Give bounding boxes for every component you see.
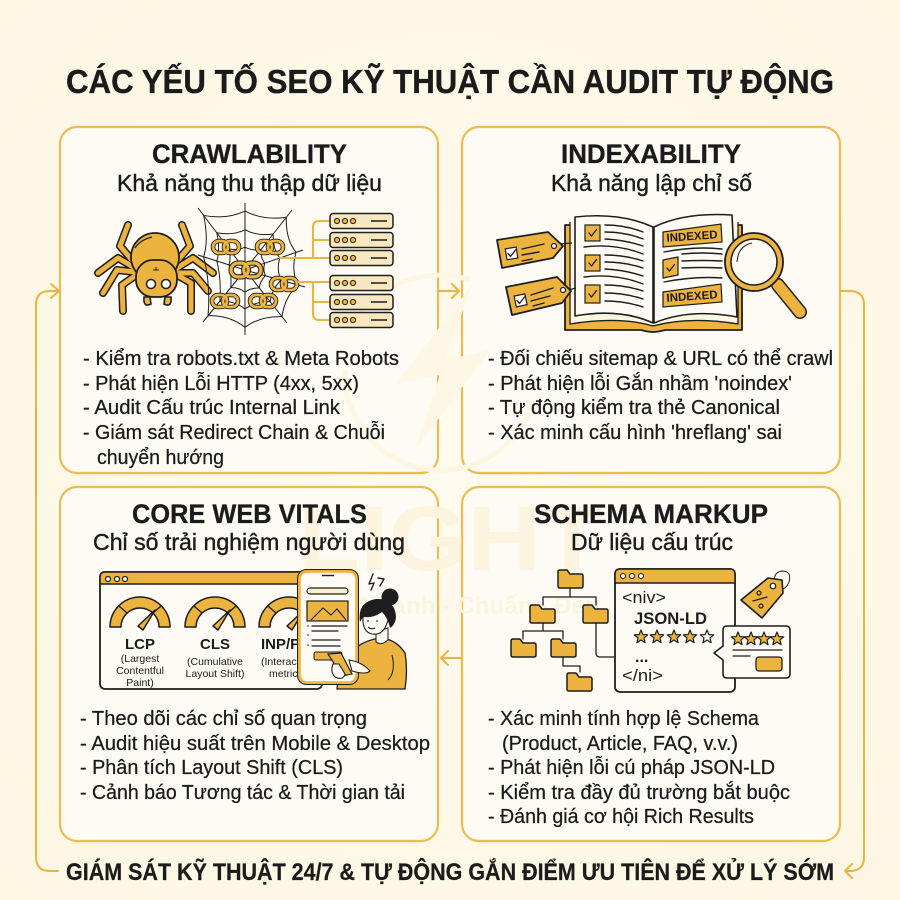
icon: browser window with gauges: Paint) xyxy=(126,677,154,689)
arrow: schema to core web vitals xyxy=(441,651,462,665)
icon: browser window with gauges: (Cumulative xyxy=(187,656,243,668)
bullets: core web vitals: - Audit hiệu suất trên Mobile & Desktop xyxy=(80,733,430,755)
icon: JSON-LD code window: ... xyxy=(635,649,648,666)
icon: browser window with gauges: (Interac xyxy=(261,656,297,668)
heading: crawlability: CRAWLABILITY xyxy=(152,139,347,169)
icon: browser window with gauges: LCP xyxy=(125,636,155,653)
heading: schema markup: SCHEMA MARKUP xyxy=(534,499,768,529)
bullets: indexability: - Xác minh cấu hình 'hreflang' sai xyxy=(488,422,782,444)
icon: JSON-LD code window: <niv> xyxy=(622,589,666,607)
arrow: crawlability to indexability xyxy=(438,284,459,298)
icon: browser window with gauges: metrics) xyxy=(269,668,306,680)
heading: core web vitals: CORE WEB VITALS xyxy=(132,499,367,529)
subheading: crawlability: Khả năng thu thập dữ liệu xyxy=(117,170,382,196)
bullets: schema markup: - Đánh giá cơ hội Rich Results xyxy=(488,806,754,828)
bullets: core web vitals: - Phân tích Layout Shift (CLS) xyxy=(80,757,343,779)
subheading: indexability: Khả năng lập chỉ số xyxy=(551,170,752,196)
bullets: core web vitals: - Theo dõi các chỉ số quan trọng xyxy=(80,708,367,730)
icon: open book xyxy=(565,214,742,332)
icon: server stack with connectors xyxy=(280,214,393,328)
bullets: schema markup xyxy=(488,708,790,828)
title: CÁC YẾU TỐ SEO KỸ THUẬT CẦN AUDIT TỰ ĐỘNG xyxy=(66,62,834,100)
icon: JSON-LD code window: JSON-LD xyxy=(634,609,707,628)
bullets: crawlability: - Kiểm tra robots.txt & Meta Robots xyxy=(83,348,399,370)
icon: phone and person xyxy=(298,570,406,689)
icon: folder tree xyxy=(511,570,615,691)
bullets: schema markup: (Product, Article, FAQ, v.v.) xyxy=(502,733,738,755)
footer banner: GIÁM SÁT KỸ THUẬT 24/7 & TỰ ĐỘNG GẮN ĐIỂM ƯU TIÊN ĐỂ XỬ LÝ SỚM xyxy=(66,857,834,886)
icon: percent tag xyxy=(741,571,790,618)
bullets: indexability: - Đối chiếu sitemap & URL có thể crawl xyxy=(488,348,833,370)
icon: spider xyxy=(98,225,213,311)
icon: open book: INDEXED xyxy=(666,229,718,245)
panel: indexability card xyxy=(462,127,840,473)
watermark: Nhanh - Chuẩn - Đẹp xyxy=(360,592,600,620)
heading: indexability: INDEXABILITY xyxy=(561,139,741,169)
icon: JSON-LD code window xyxy=(615,569,735,692)
icon: spider web with links xyxy=(198,203,305,335)
bullets: indexability: - Phát hiện lỗi Gắn nhầm 'noindex' xyxy=(488,372,792,395)
arrow: left feedback loop xyxy=(36,284,59,871)
subheading: schema markup: Dữ liệu cấu trúc xyxy=(571,529,733,555)
icon: browser window with gauges: Layout Shift) xyxy=(186,668,244,680)
panel: schema markup card xyxy=(462,487,840,841)
arrow: indexability to schema xyxy=(840,291,864,878)
panel: crawlability card xyxy=(60,127,438,473)
bullets: schema markup: - Phát hiện lỗi cú pháp JSON-LD xyxy=(488,756,775,779)
bullets: core web vitals xyxy=(80,708,430,804)
icon: checklist tags xyxy=(497,232,576,315)
bullets: schema markup: - Xác minh tính hợp lệ Schema xyxy=(488,708,760,730)
bullets: crawlability: - Phát hiện Lỗi HTTP (4xx, 5xx) xyxy=(83,372,359,395)
subheading: core web vitals: Chỉ số trải nghiệm người dùng xyxy=(93,529,405,555)
bullets: indexability xyxy=(488,348,833,444)
bullets: core web vitals: - Cảnh báo Tương tác & Thời gian tải xyxy=(80,782,405,804)
icon: magnifying glass xyxy=(725,233,800,312)
bullets: indexability: - Tự động kiểm tra thẻ Canonical xyxy=(488,397,780,419)
icon: browser window with gauges: INP/F xyxy=(261,636,299,653)
icon: open book: INDEXED xyxy=(666,289,718,305)
watermark: LIGHT xyxy=(298,488,603,590)
icon: browser window with gauges xyxy=(100,572,322,689)
bullets: crawlability: - Audit Cấu trúc Internal Link xyxy=(83,397,341,419)
panel: core web vitals card xyxy=(60,487,438,841)
bullets: crawlability: chuyển hướng xyxy=(97,447,224,469)
icon: JSON-LD code window: </ni> xyxy=(622,667,663,685)
bullets: crawlability: - Giám sát Redirect Chain & Chuỗi xyxy=(83,421,385,444)
icon: browser window with gauges: (Largest xyxy=(121,653,159,665)
icon: browser window with gauges: CLS xyxy=(200,636,230,653)
bullets: crawlability xyxy=(83,348,399,469)
watermark xyxy=(298,275,603,620)
icon: review bubble xyxy=(714,626,790,678)
icon: browser window with gauges: Contentful xyxy=(116,665,164,677)
bullets: schema markup: - Kiểm tra đầy đủ trường bắt buộc xyxy=(488,781,790,804)
